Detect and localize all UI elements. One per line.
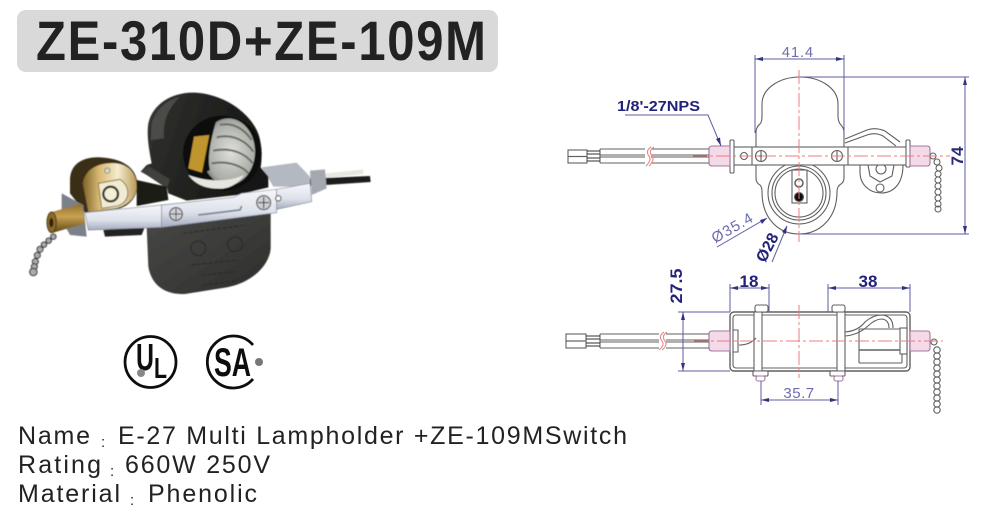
rating line	[18, 451, 270, 480]
certification logo: UL	[125, 336, 176, 388]
title badge: ZE-310D+ZE-109M	[36, 11, 486, 73]
lower phenolic body	[147, 212, 271, 294]
name line: Name	[18, 422, 90, 450]
dimension: 38: 38	[859, 272, 877, 291]
product photo: lampholder with switch	[30, 93, 371, 294]
name line: :	[101, 434, 105, 451]
certification logo: UL: U	[136, 337, 154, 379]
pull chain	[30, 234, 56, 276]
dark block and bracket behind bar	[137, 180, 168, 206]
dimension: 35.7: 35.7	[783, 385, 815, 402]
upper socket housing	[141, 93, 268, 201]
bar screws	[170, 196, 281, 220]
socket circles	[768, 162, 830, 224]
terminal stub	[733, 330, 756, 352]
embossed marks	[183, 225, 247, 285]
dimension: 41.4: 41.4	[782, 45, 814, 61]
material line: :	[130, 492, 134, 509]
dimension: 18	[730, 272, 769, 312]
material line: Phenolic	[148, 480, 257, 508]
certification logo: UL: L	[154, 353, 167, 385]
housing	[730, 312, 910, 371]
dimension: 41.4	[755, 45, 844, 133]
callout: thread size: 1/8'-27NPS	[617, 99, 700, 115]
side view centre lines	[694, 305, 943, 378]
specification text	[18, 422, 627, 509]
dimension: 27.5	[667, 268, 730, 371]
material line: Material	[18, 480, 120, 508]
steel bar	[85, 183, 312, 230]
certification logo: CSA	[207, 336, 263, 388]
wires and terminals	[568, 147, 709, 166]
dimension: 38	[828, 272, 910, 312]
dimension: 74: 74	[948, 146, 967, 165]
brass threaded nut	[47, 203, 85, 233]
callout: thread size	[617, 99, 721, 146]
threaded metal shell	[202, 118, 255, 185]
switch pivot	[103, 187, 118, 201]
dimension: 18: 18	[740, 272, 758, 291]
bottom of shell	[188, 175, 244, 189]
dimension: 27.5: 27.5	[667, 269, 686, 303]
technical drawing: front view	[568, 77, 942, 234]
switch body	[70, 157, 137, 213]
certification logo: CSA: SA	[214, 341, 251, 385]
cables	[262, 163, 371, 195]
mounting bar	[730, 140, 910, 173]
dimension: diameter 35.4: Ø35.4	[709, 209, 757, 247]
lamp body outline	[756, 77, 844, 234]
name line: E-27 Multi Lampholder +ZE-109MSwitch	[118, 422, 627, 450]
switch plate	[98, 179, 128, 208]
terminal tab on housing	[142, 166, 170, 188]
pull chain	[931, 339, 940, 413]
dimension: diameter 28: Ø28	[753, 230, 783, 265]
switch module	[845, 315, 907, 363]
rating line: :	[110, 463, 114, 480]
pull chain	[930, 153, 942, 212]
material line	[18, 480, 257, 509]
dimension: 35.7	[761, 381, 838, 405]
rating line: 660W 250V	[125, 451, 270, 479]
brass contact	[188, 135, 209, 173]
housing highlight	[151, 97, 180, 140]
front view centre lines	[693, 70, 950, 242]
dark inner cavity	[188, 119, 217, 178]
rating line: Rating	[18, 451, 101, 479]
threaded nipples	[709, 146, 930, 166]
switch behind bar	[845, 129, 903, 193]
nipples	[709, 331, 930, 351]
screw threads	[212, 124, 253, 173]
socket ring	[183, 116, 262, 191]
clamp posts and screws	[753, 305, 845, 381]
wires and terminals	[566, 332, 709, 350]
technical drawing: side view	[566, 305, 940, 413]
dimension: 74	[800, 77, 969, 234]
